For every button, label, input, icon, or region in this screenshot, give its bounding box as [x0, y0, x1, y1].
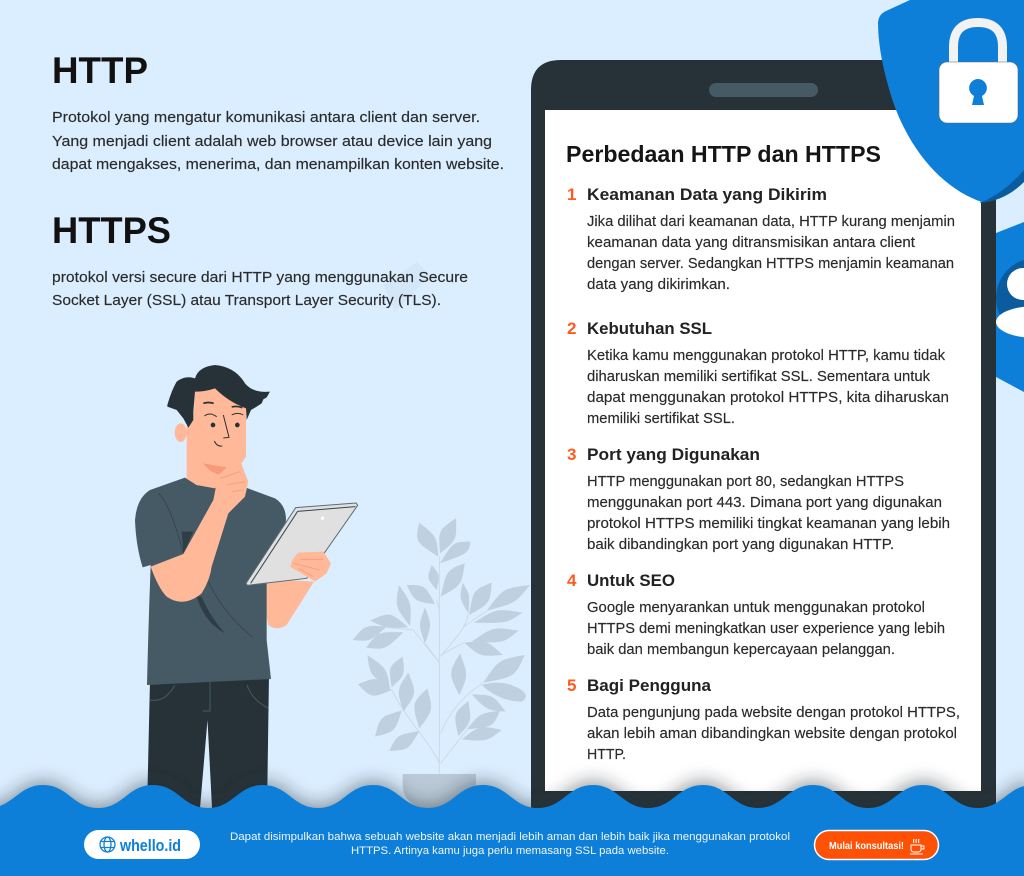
icon: coffee cup: [910, 839, 924, 854]
tablet: [246, 503, 358, 585]
item 4: SEO: 4: [567, 571, 577, 590]
pocket details: [150, 682, 268, 711]
plant pot: [403, 774, 476, 810]
t-shirt: [135, 478, 286, 685]
item 2: Kebutuhan SSL: diharuskan memiliki sertifikat SSL. Sementara untuk: [587, 369, 931, 385]
text block: HTTP description: dapat mengakses, menerima, dan menampilkan konten website.: [52, 156, 504, 173]
item 4: SEO: [567, 571, 945, 658]
item 1: Keamanan Data: data yang dikirimkan.: [587, 277, 730, 293]
ear: [175, 423, 187, 442]
icon: globe: [100, 837, 115, 852]
text block: HTTPS description: protokol versi secure dari HTTP yang menggunakan Secure: [52, 269, 468, 286]
shirt shadow details: [182, 532, 225, 633]
item 2: Kebutuhan SSL: Ketika kamu menggunakan protokol HTTP, kamu tidak: [587, 348, 946, 364]
item 4: SEO: Untuk SEO: [587, 571, 675, 590]
item 3: Port: menggunakan port 443. Dimana port yang digunakan: [587, 495, 942, 511]
item 4: SEO: baik dan membangun kepercayaan pelanggan.: [587, 642, 895, 658]
keyhole: [969, 79, 987, 105]
illustration: man holding tablet: [135, 365, 358, 812]
near arm and fist: [151, 462, 248, 602]
logo: whello.id: whello.id: [119, 836, 181, 855]
text block: HTTP description: Yang menjadi client adalah web browser atau device lain yang: [52, 133, 492, 150]
text block: HTTP description: Protokol yang mengatur komunikasi antara client dan server.: [52, 109, 480, 126]
panel: phone frame: [531, 60, 996, 820]
item 5: Pengguna: Bagi Pengguna: [587, 676, 712, 695]
button: Mulai konsultasi: Mulai konsultasi!: [829, 841, 904, 852]
wave top shadow: [0, 780, 1024, 871]
item 1: Keamanan Data: Keamanan Data yang Dikirim: [587, 185, 827, 204]
beard shading: [203, 463, 227, 475]
footer conclusion text: [230, 831, 790, 857]
footer conclusion text: Dapat disimpulkan bahwa sebuah website akan menjadi lebih aman dan lebih baik jika menggunakan protokol: [230, 831, 790, 843]
item 2: Kebutuhan SSL: dapat menggunakan protokol HTTPS, kita diharuskan: [587, 390, 949, 406]
footer conclusion text: HTTPS. Artinya kamu juga perlu memasang SSL pada website.: [351, 845, 669, 857]
panel heading: Perbedaan HTTP dan HTTPS: [566, 141, 881, 167]
heading: HTTP: HTTP: [52, 50, 148, 91]
item 4: SEO: Google menyarankan untuk menggunakan protokol: [587, 600, 925, 616]
gap between legs: [200, 720, 212, 808]
far forearm: [263, 580, 314, 628]
side shield with user icon: [996, 222, 1024, 392]
item 5: Pengguna: Data pengunjung pada website dengan protokol HTTPS,: [587, 705, 960, 721]
text block: HTTP description: [52, 109, 504, 173]
item 1: Keamanan Data: [567, 185, 955, 293]
hair: [167, 365, 270, 428]
padlock body: [939, 62, 1018, 123]
item 3: Port: 3: [567, 445, 576, 464]
item 2: Kebutuhan SSL: Kebutuhan SSL: [587, 319, 712, 338]
item 2: Kebutuhan SSL: [567, 319, 949, 427]
illustration: potted plant: [353, 518, 530, 810]
item 4: SEO: HTTPS demi meningkatkan user experience yang lebih: [587, 621, 945, 637]
phone screen: [545, 110, 981, 791]
phone speaker: [709, 83, 818, 97]
footer band with waves: [0, 785, 1024, 876]
item 3: Port: baik dibandingkan port yang digunakan HTTP.: [587, 537, 894, 553]
item 5: Pengguna: HTTP.: [587, 747, 626, 763]
item 3: Port: protokol HTTPS memiliki tingkat keamanan yang lebih: [587, 516, 950, 532]
item 3: Port: [567, 445, 950, 553]
face features: [203, 402, 243, 446]
trousers: [147, 675, 269, 812]
item 3: Port: Port yang Digunakan: [587, 445, 760, 464]
item 1: Keamanan Data: 1: [567, 185, 576, 204]
item 5: Pengguna: 5: [567, 676, 576, 695]
heading: HTTPS: HTTPS: [52, 210, 171, 251]
logo: whello.id: [84, 830, 200, 859]
text block: HTTPS description: [52, 269, 468, 309]
item 2: Kebutuhan SSL: 2: [567, 319, 576, 338]
item 5: Pengguna: [567, 676, 960, 763]
item 1: Keamanan Data: Jika dilihat dari keamanan data, HTTP kurang menjamin: [587, 214, 955, 230]
neck and face: [187, 388, 246, 488]
faint watermark: [383, 262, 430, 312]
item 1: Keamanan Data: dengan server. Sedangkan HTTPS menjamin keamanan: [587, 256, 954, 272]
icon: security shield with padlock: [878, 0, 1024, 203]
button: Mulai konsultasi: [814, 830, 938, 860]
item 3: Port: HTTP menggunakan port 80, sedangkan HTTPS: [587, 474, 904, 490]
padlock shackle: [954, 22, 1002, 64]
text block: HTTPS description: Socket Layer (SSL) atau Transport Layer Security (TLS).: [52, 292, 441, 309]
hand on tablet: [290, 552, 331, 582]
item 5: Pengguna: akan lebih aman dibandingkan website dengan protokol: [587, 726, 957, 742]
item 2: Kebutuhan SSL: memiliki sertifikat SSL.: [587, 411, 735, 427]
item 1: Keamanan Data: keamanan data yang ditransmisikan antara client: [587, 235, 915, 251]
